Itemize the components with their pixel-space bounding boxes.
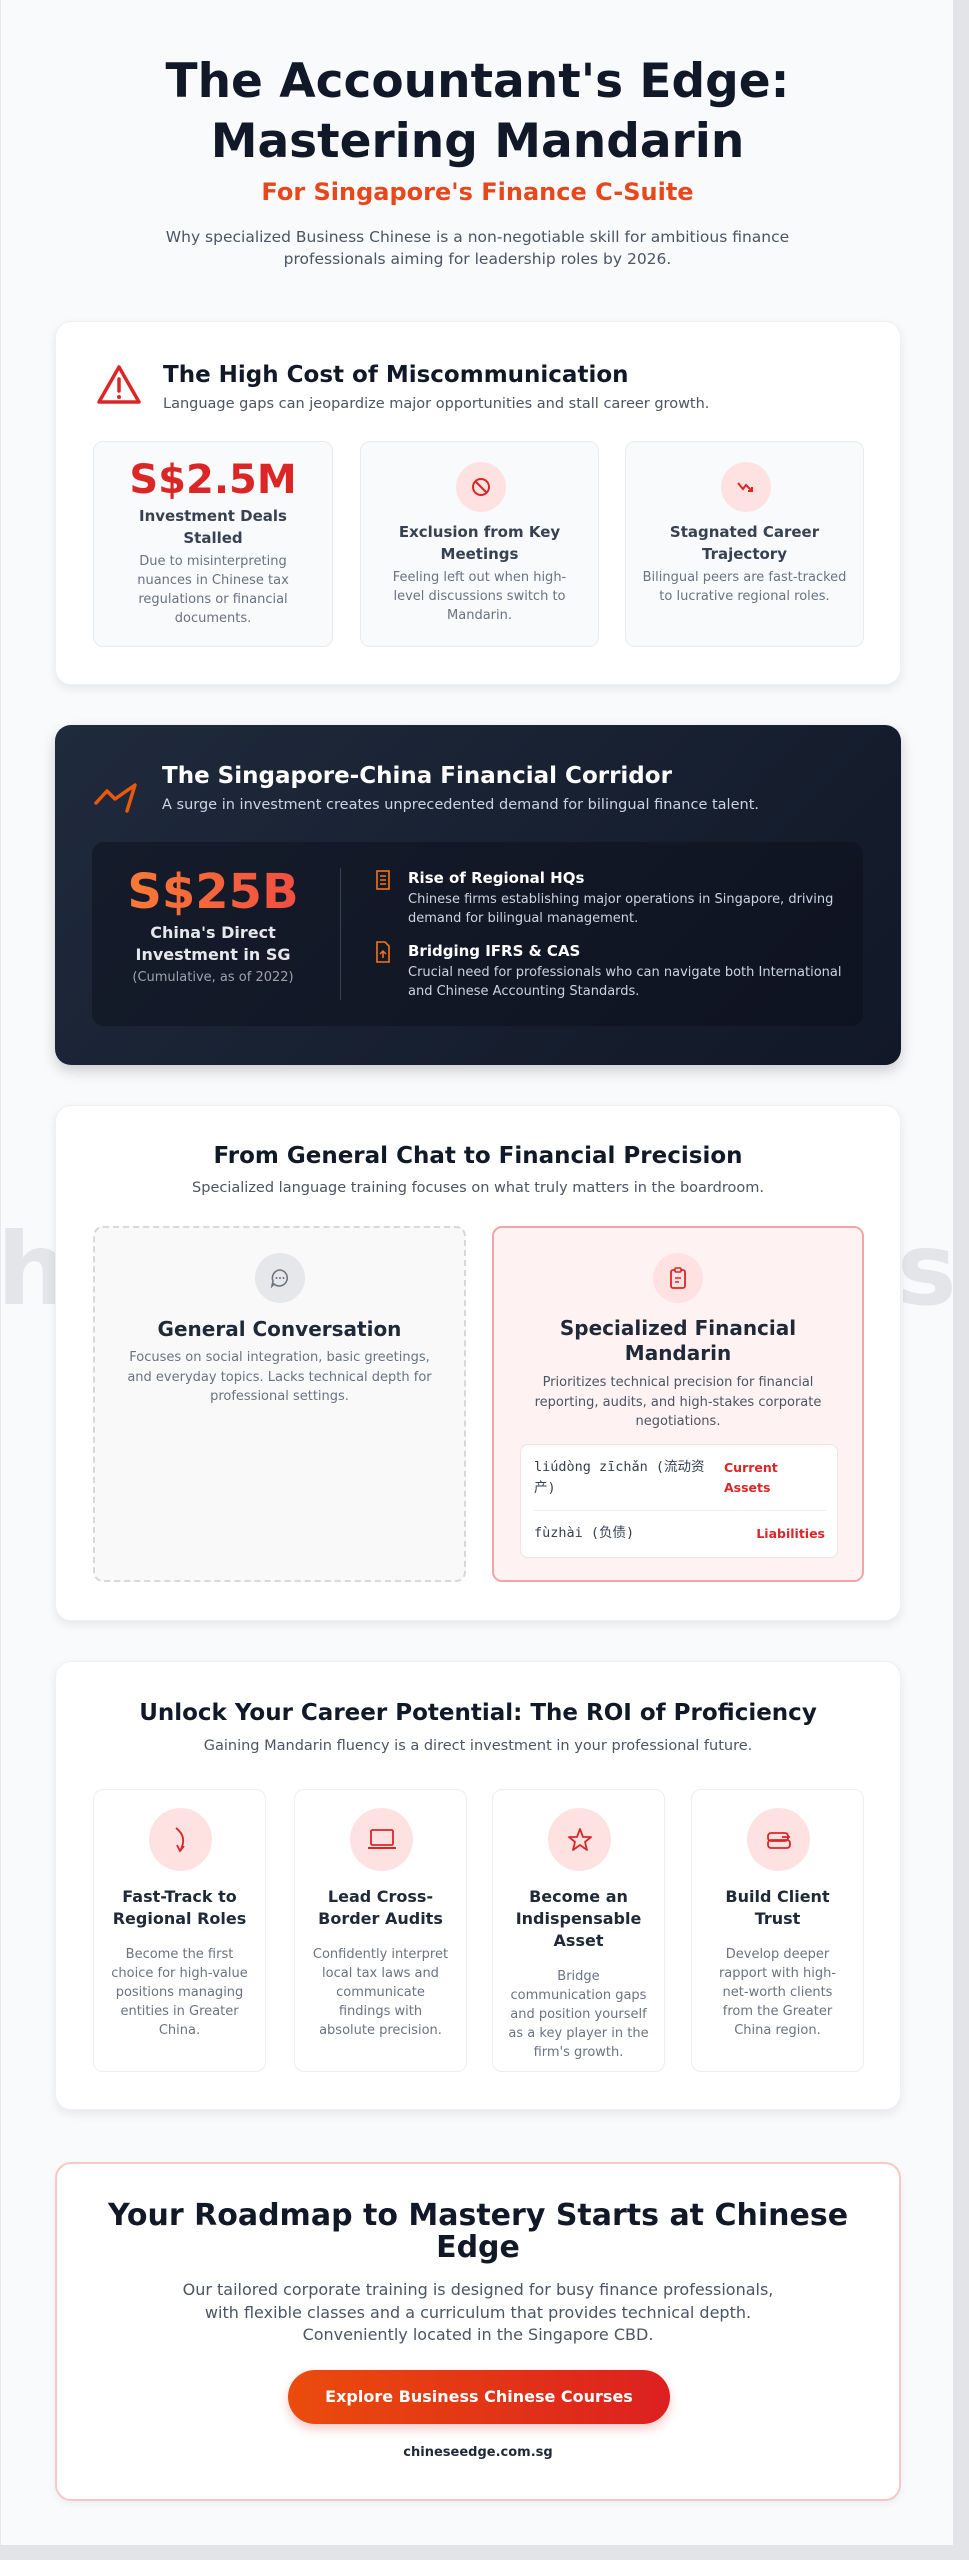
item: IFRS & CAS	[376, 941, 841, 999]
heading: Your Roadmap to Mastery Starts at Chinese Edge	[108, 2198, 848, 2265]
icon: handshake	[747, 1808, 810, 1871]
heading: The Singapore-China Financial Corridor	[162, 763, 672, 789]
stat: S$25B: S$25B	[127, 864, 299, 920]
vocabulary list: fùzhài (负债)	[534, 1525, 634, 1541]
box: general conversation: General Conversation	[158, 1317, 401, 1341]
vocabulary list: Assets	[724, 1480, 770, 1495]
vocabulary list: liúdòng zīchǎn (流动资产)	[534, 1459, 705, 1496]
subheading: Gaining Mandarin fluency is a direct investment in your professional future.	[204, 1738, 752, 1754]
stat: S$25B: (Cumulative, as of 2022)	[132, 970, 294, 985]
stat card: exclusion: Mandarin.	[447, 608, 512, 623]
subheading: Language gaps can jeopardize major opportunities and stall career growth.	[163, 396, 709, 412]
vocabulary list	[520, 1444, 838, 1558]
stat: S$25B: China's Direct	[150, 923, 276, 942]
subheading: A surge in investment creates unprecedented demand for bilingual finance talent.	[162, 797, 759, 813]
stat card: stagnation: Stagnated Career Trajectory	[670, 523, 819, 563]
box: general conversation: Focuses on social integration, basic greetings, and everyday topics. Lacks technical depth for professional settings.	[127, 1350, 432, 1404]
heading: From General Chat to Financial Precision	[214, 1143, 742, 1169]
panel: call to action	[55, 2162, 901, 2501]
heading: The High Cost of Miscommunication	[163, 362, 629, 388]
item: regional HQs	[376, 869, 833, 926]
stat card: stagnation: Bilingual peers are fast-tracked to lucrative regional roles.	[643, 570, 846, 604]
icon: star	[548, 1808, 611, 1871]
panel: financial corridor	[55, 725, 901, 1065]
icon: laptop	[350, 1808, 413, 1871]
icon: trend down	[721, 462, 771, 512]
icon: chat	[255, 1253, 305, 1303]
card: fast-track: Become the first choice for high-value positions managing entities in Greater China.	[111, 1947, 248, 2038]
box: specialized financial mandarin	[492, 1226, 864, 1582]
intro text: Why specialized Business Chinese is a non-negotiable skill for ambitious finance professionals aiming for leadership roles by 2026.	[166, 228, 789, 268]
subheading: Specialized language training focuses on what truly matters in the boardroom.	[192, 1180, 764, 1196]
card: client trust: Develop deeper rapport with high-net-worth clients from the Greater China region.	[719, 1947, 836, 2038]
title: The Accountant's Edge:	[166, 54, 789, 109]
heading: Unlock Your Career Potential: The ROI of Proficiency	[139, 1700, 817, 1726]
card: indispensable: Bridge communication gaps and position yourself as a key player in the firm's growth.	[508, 1969, 649, 2060]
stat card: S$2.5M: S$2.5M	[129, 457, 297, 503]
body text: Our tailored corporate training is designed for busy finance professionals, with flexible classes and a curriculum that provides technical depth. Conveniently located in the Singapore CBD.	[183, 2280, 773, 2344]
card: fast-track: Fast-Track to Regional Roles	[113, 1887, 246, 1928]
box: specialized financial mandarin: Mandarin	[625, 1341, 731, 1365]
stat card: S$2.5M: Investment Deals Stalled	[139, 507, 287, 547]
icon: warning	[97, 365, 141, 404]
icon: ban	[456, 462, 506, 512]
inner stats panel: Crucial need for professionals who can navigate both International and Chinese Accounting Standards.	[408, 965, 841, 999]
panel: high cost of miscommunication	[55, 321, 901, 685]
website: chineseedge.com.sg	[403, 2445, 553, 2460]
icon: arrow	[149, 1808, 212, 1871]
stat card: S$2.5M: Due to misinterpreting nuances in Chinese tax regulations or financial documents.	[137, 554, 289, 626]
subtitle: For Singapore's Finance C-Suite	[261, 178, 694, 206]
panel: ROI of proficiency	[55, 1661, 901, 2110]
button	[288, 2370, 670, 2424]
stat card: exclusion	[360, 441, 599, 647]
box: general conversation	[93, 1226, 466, 1582]
panel: general vs financial	[55, 1105, 901, 1621]
stat: S$25B: Investment in SG	[135, 945, 291, 964]
stat card: S$2.5M	[93, 441, 333, 647]
card: audits	[294, 1789, 467, 2072]
stat: S$25B	[127, 864, 299, 985]
button: Explore Business Chinese Courses	[325, 2387, 633, 2406]
card: client trust	[691, 1789, 864, 2072]
stat card: exclusion: Exclusion from Key Meetings	[399, 523, 560, 563]
inner stats panel: Rise of Regional HQs	[408, 869, 584, 887]
watermark letters	[0, 1211, 953, 1328]
title	[166, 54, 789, 169]
box: specialized financial mandarin: Prioritizes technical precision for financial reporting, audits, and high-stakes corporate negotiations.	[535, 1375, 821, 1429]
stat card: stagnation	[625, 441, 864, 647]
inner stats panel: Chinese firms establishing major operations in Singapore, driving demand for bilingual management.	[408, 892, 833, 926]
title: Mastering Mandarin	[211, 114, 744, 169]
stat card: exclusion: Feeling left out when high-level discussions switch to	[393, 570, 566, 604]
card: fast-track	[93, 1789, 266, 2072]
card: indispensable: Become an Indispensable Asset	[516, 1887, 641, 1950]
vocabulary list: Liabilities	[756, 1526, 825, 1541]
box: specialized financial mandarin: Specialized Financial	[560, 1316, 796, 1340]
vocabulary list: Current	[724, 1460, 778, 1475]
icon: clipboard	[653, 1253, 703, 1303]
card: audits: Lead Cross-Border Audits	[318, 1887, 443, 1928]
inner stats panel: Bridging IFRS & CAS	[408, 942, 580, 960]
card: indispensable	[492, 1789, 665, 2072]
inner stats panel	[92, 842, 863, 1026]
card: client trust: Build Client Trust	[725, 1887, 830, 1928]
icon: trend up	[94, 783, 137, 813]
card: audits: Confidently interpret local tax laws and communicate findings with absolute precision.	[313, 1947, 448, 2038]
